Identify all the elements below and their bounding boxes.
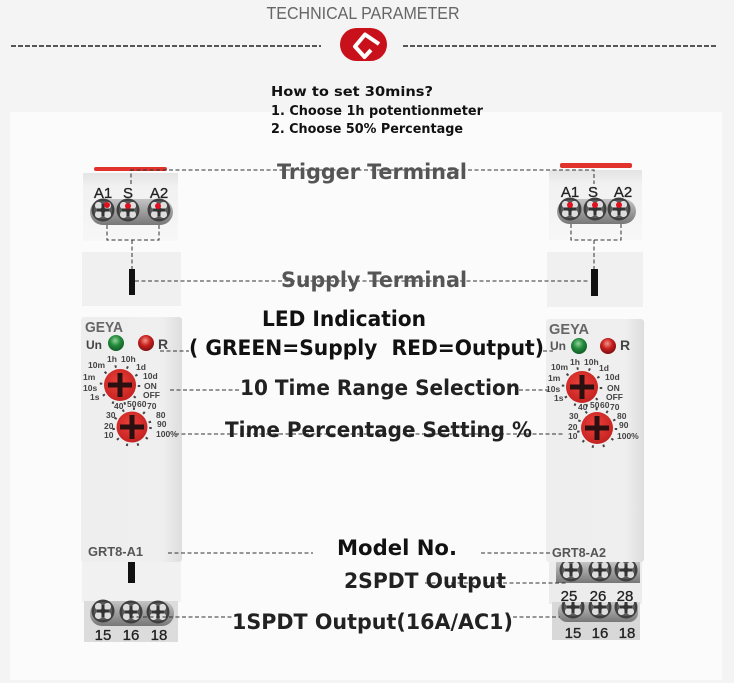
percentage knob: 40 xyxy=(114,401,124,411)
percentage knob: 20 xyxy=(104,421,114,431)
percentage knob: 90 xyxy=(619,420,629,430)
time range knob: 1s xyxy=(554,393,564,403)
percentage knob xyxy=(568,400,639,447)
percentage knob: 50 xyxy=(127,399,137,409)
label: Trigger Terminal: Trigger Terminal xyxy=(277,160,467,184)
model label: GRT8-A2 xyxy=(552,546,606,560)
time range knob xyxy=(83,354,160,404)
percentage knob: 30 xyxy=(569,411,579,421)
percentage knob xyxy=(104,399,178,446)
percentage knob: 90 xyxy=(157,419,167,429)
black slot xyxy=(129,269,135,295)
2SPDT terminals: 28 xyxy=(617,588,633,605)
terminal strip: A2 xyxy=(614,184,632,201)
header divider right xyxy=(403,45,716,47)
percentage knob: 10 xyxy=(104,430,114,440)
time range knob: 1s xyxy=(90,392,100,402)
output terminals: 16 xyxy=(123,627,139,644)
percentage knob: 70 xyxy=(147,401,157,411)
terminal strip: A2 xyxy=(150,185,168,202)
LED row xyxy=(550,337,630,354)
label: 1SPDT Output: 1SPDT Output(16A/AC1) xyxy=(232,610,513,634)
neck housing xyxy=(547,252,643,307)
header divider left xyxy=(11,45,321,47)
time range knob: 1m xyxy=(83,372,96,382)
output terminals: 15 xyxy=(95,627,111,644)
1SPDT terminals: 15 xyxy=(565,625,581,642)
2SPDT terminals: 26 xyxy=(590,588,606,605)
panel: left relay GRT8-A1 xyxy=(81,167,182,644)
percentage knob: 40 xyxy=(578,402,588,412)
time range knob: 10m xyxy=(88,360,105,370)
2SPDT terminals: 25 xyxy=(561,588,577,605)
leader lines xyxy=(107,170,621,617)
lower housing xyxy=(82,562,181,602)
LED row: Un xyxy=(86,338,102,352)
output terminals xyxy=(84,600,178,644)
2SPDT terminals xyxy=(549,558,642,605)
1SPDT terminals xyxy=(552,602,640,640)
instructions text block: 1. Choose 1h potentionmeter xyxy=(271,103,483,119)
model label: GRT8-A1 xyxy=(88,545,143,559)
percentage knob: 50 xyxy=(590,400,600,410)
percentage knob: 60 xyxy=(600,400,610,410)
percentage knob: 30 xyxy=(106,410,116,420)
time range knob: 10d xyxy=(143,371,158,381)
top housing xyxy=(549,170,642,240)
label: LED colour key: ( GREEN=Supply RED=Output) xyxy=(189,336,544,360)
time range knob: 10s xyxy=(83,383,97,393)
1SPDT terminals: 16 xyxy=(592,625,608,642)
time range knob: ON xyxy=(607,383,620,393)
front face xyxy=(81,317,182,562)
label: Time Percentage Setting: Time Percentage Setting % xyxy=(225,418,532,442)
GEYA brand: GEYA xyxy=(85,319,123,336)
neck housing xyxy=(82,252,181,306)
top clip red bar xyxy=(560,163,632,168)
icon: brand logo xyxy=(340,28,387,61)
title: TECHNICAL PARAMETER xyxy=(266,3,460,23)
terminal strip xyxy=(557,184,636,224)
output terminals: 18 xyxy=(151,627,167,644)
percentage knob: 80 xyxy=(156,410,166,420)
time range knob xyxy=(546,357,623,406)
black slot xyxy=(591,269,598,296)
label: Model No.: Model No. xyxy=(337,536,457,560)
top housing xyxy=(83,173,178,241)
lower black slot xyxy=(128,562,135,583)
label: LED Indication: LED Indication xyxy=(262,307,426,331)
terminal strip: A1 xyxy=(561,184,579,201)
time range knob: 10m xyxy=(551,362,568,372)
terminal strip: S xyxy=(123,185,133,202)
LED row: R xyxy=(620,337,630,353)
front face xyxy=(546,319,644,562)
percentage knob: 100% xyxy=(156,429,178,439)
time range knob: 10s xyxy=(546,384,560,394)
top clip red bar xyxy=(94,167,167,171)
percentage knob: 10 xyxy=(568,431,578,441)
time range knob: 1m xyxy=(548,373,561,383)
time range knob: ON xyxy=(144,381,157,391)
panel: right relay GRT8-A2 xyxy=(546,163,644,642)
terminal strip: A1 xyxy=(94,185,112,202)
terminal strip xyxy=(90,185,173,225)
GEYA brand: GEYA xyxy=(549,321,589,338)
time range knob: 1h xyxy=(107,354,117,364)
percentage knob: 100% xyxy=(617,431,639,441)
time range knob: 10h xyxy=(584,357,599,367)
percentage knob: 20 xyxy=(568,422,578,432)
terminal strip: S xyxy=(588,184,598,201)
instructions text block: 2. Choose 50% Percentage xyxy=(271,121,463,137)
time range knob: 1d xyxy=(136,362,146,372)
time range knob: 10h xyxy=(121,354,136,364)
time range knob: 10d xyxy=(605,372,620,382)
percentage knob: 60 xyxy=(137,399,147,409)
percentage knob: 70 xyxy=(610,402,620,412)
time range knob: 1d xyxy=(599,363,609,373)
percentage knob: 80 xyxy=(617,411,627,421)
1SPDT terminals: 18 xyxy=(619,625,635,642)
label: 2SPDT Output: 2SPDT Output xyxy=(344,569,506,593)
LED row: R xyxy=(158,336,168,352)
label: 10 Time Range Selection: 10 Time Range Selection xyxy=(240,376,520,400)
LED row: Un xyxy=(550,339,566,353)
LED row xyxy=(86,335,168,352)
instructions text block: How to set 30mins? xyxy=(271,84,433,100)
label: Supply Terminal: Supply Terminal xyxy=(281,268,467,292)
time range knob: 1h xyxy=(570,357,580,367)
time range knob: OFF xyxy=(143,390,160,400)
instructions text block xyxy=(271,84,483,137)
time range knob: OFF xyxy=(606,392,623,402)
